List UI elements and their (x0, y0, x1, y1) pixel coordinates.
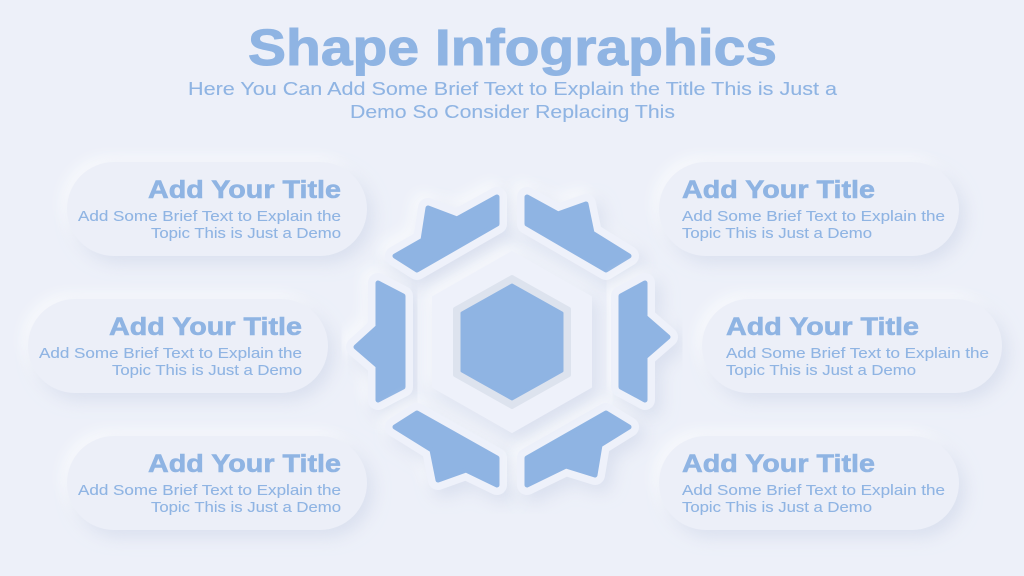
text block: Add Some Brief Text to Explain the (726, 346, 989, 362)
text block: Add Some Brief Text to Explain the (682, 209, 945, 225)
panel: middle left (28, 299, 328, 393)
text block (726, 346, 989, 379)
text block (78, 209, 341, 242)
central hexagon diagram (356, 197, 668, 485)
text block: Topic This is Just a Demo (726, 363, 916, 379)
title: Shape Infographics (248, 19, 777, 76)
panel: middle right (702, 299, 1002, 393)
segment: bottom left (395, 413, 497, 485)
outer raised hexagon (433, 252, 591, 432)
centre blue hexagon (462, 285, 562, 399)
segment: top right (527, 197, 629, 270)
text block (682, 483, 945, 516)
panel: top left (67, 162, 367, 256)
segment: left (356, 283, 403, 400)
text block (39, 346, 302, 379)
heading: Add Your Title (109, 313, 302, 341)
text block: Topic This is Just a Demo (151, 226, 341, 242)
text block: Topic This is Just a Demo (682, 500, 872, 516)
panel: top right (659, 162, 959, 256)
heading: Add Your Title (148, 176, 341, 204)
subtitle: Here You Can Add Some Brief Text to Explain the Title This is Just a (188, 79, 838, 99)
segment: top left (395, 197, 497, 270)
inset hexagon ring (455, 277, 569, 407)
heading: Add Your Title (148, 450, 341, 478)
heading: Add Your Title (726, 313, 919, 341)
subtitle (188, 79, 838, 122)
text block: Add Some Brief Text to Explain the (682, 483, 945, 499)
text block (78, 483, 341, 516)
text block (682, 209, 945, 242)
segment: bottom right (527, 413, 629, 485)
heading: Add Your Title (682, 176, 875, 204)
subtitle: Demo So Consider Replacing This (350, 102, 675, 122)
text block: Topic This is Just a Demo (682, 226, 872, 242)
text block: Topic This is Just a Demo (151, 500, 341, 516)
panel: bottom right (659, 436, 959, 530)
text block: Add Some Brief Text to Explain the (78, 483, 341, 499)
heading: Add Your Title (682, 450, 875, 478)
text block: Add Some Brief Text to Explain the (39, 346, 302, 362)
text block: Topic This is Just a Demo (112, 363, 302, 379)
panel: bottom left (67, 436, 367, 530)
segment: right (621, 283, 668, 400)
text block: Add Some Brief Text to Explain the (78, 209, 341, 225)
